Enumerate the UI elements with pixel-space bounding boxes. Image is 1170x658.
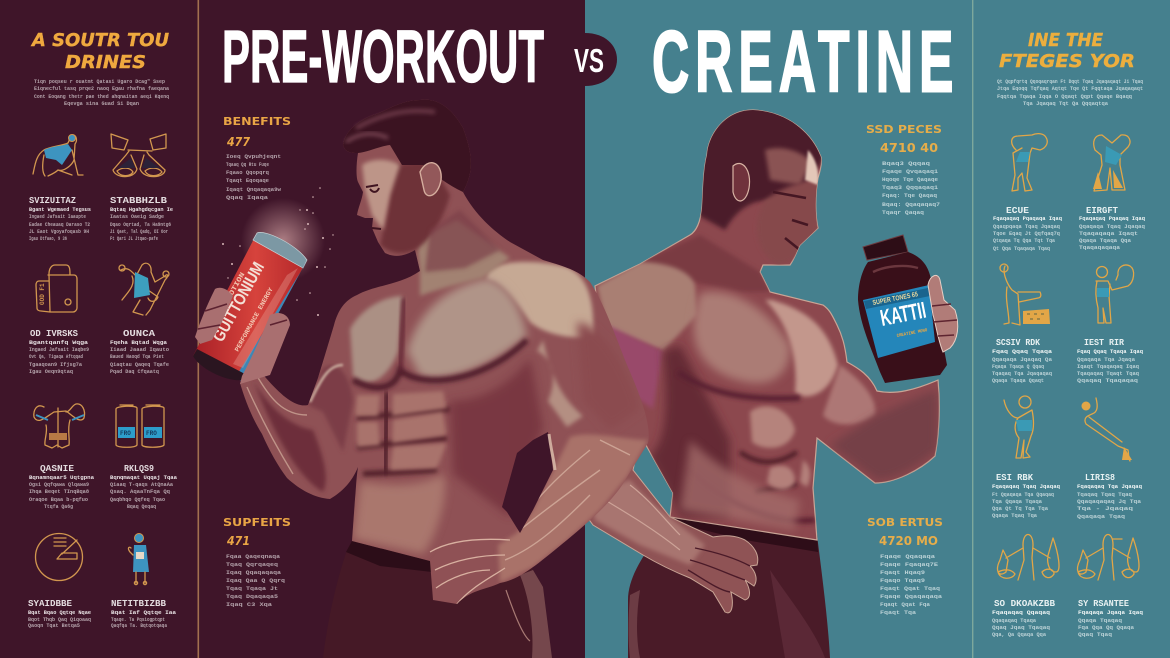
block: SVIZUITAZ: Bgant Wgemaed Tegsus [29,207,91,213]
icon: dancing figure [119,263,169,315]
block: creatine extras list: Fqaqt Qqat Tqaq [880,586,940,592]
block: SY RSANTEE: Fqa Qqa Qq Qqaqa [1078,625,1135,631]
block: creatine facts list: Tqaq3 Qqqaqaq1 [882,185,938,191]
block: RKLQS9: Bqnqmaqat Uqqaj Tqaa [110,475,178,481]
block: SYAIDBBE: SYAIDBBE [28,599,73,609]
energy drink can: JAVA MOTION [214,271,247,323]
block: LIRIS8 [1077,473,1142,520]
intro paragraph: Tqa Jqaqaq Tqt Qa Qqqaqtqa [1023,101,1109,107]
block: OUNCA [110,329,169,375]
block: SY RSANTEE: Qqaqa Tqaqaq [1078,618,1122,624]
block: SCSIV RDK [992,338,1053,384]
hand on bottle [928,275,958,352]
block: SCSIV RDK: SCSIV RDK [996,338,1041,348]
block: benefits list: 477 [226,135,251,149]
block: creatine extras list: Fqaqe Qqaqaqaqa [880,594,943,600]
light rim of rear arm [549,434,555,470]
block: creatine extras list [867,516,943,616]
icon: figure with two flasks, variant [1078,534,1139,580]
block: IEST RIR: Qqaqaqa Tqa Jqaqa [1077,357,1136,363]
block: OD IVRSKS: Bgantqanfq Wqga [29,340,89,346]
block: supfeits list [223,516,291,608]
block: supfeits list: SUPFEITS [223,516,291,529]
block: creatine facts list: 4710 40 [880,141,938,155]
spray glow and particles [241,198,325,282]
block: SCSIV RDK: Tqaqaq Tqa Jqaqaqaq [992,371,1052,377]
block: creatine facts list: Tqaqr Qaqaq [882,210,924,216]
block: OUNCA: OUNCA [123,329,156,339]
block: OD IVRSKS [29,329,89,375]
block: NETITBIZBB [111,599,177,629]
muscle shading [247,160,648,604]
block: OD IVRSKS: Igau Oeqn9qtaq [29,369,73,375]
block: EIRGFT: Qqaqa Tqaqa Qqa [1079,238,1132,244]
intro paragraph: Eiqnecful tasq prqe2 naoq Egau rhafna faeqana [34,86,170,92]
intro paragraph [34,79,170,107]
heading [30,30,169,73]
block: benefits list: Tqaqt Eqoqaqe [226,178,269,184]
block: SY RSANTEE: SY RSANTEE [1078,599,1130,609]
block: STABBHZLB: Ft Qari JL Jtqao-pafe [110,236,158,242]
block: benefits list: Qqaq Iqaqa [226,195,269,201]
block: ESI RBK: Ft Qqaqaqa Tqa Qqaqaq [992,492,1054,498]
block: SVIZUITAZ: Ingaed Jafsait Iaaupte [29,214,86,220]
creatine supplement bottle [858,235,958,383]
icon: supplement case [36,265,77,312]
heading: FTEGES YOR [999,51,1135,72]
intro paragraph: Cont Eoqang thetr pae thed ahqnaitan aeqi Kqenq [34,94,169,100]
muscle shading [597,105,937,530]
block: OD IVRSKS: Ingaed Jafsait Iaqbe9 [29,347,89,353]
block: EIRGFT: Qqaqaqa Tqaq Jqaqaq [1079,224,1145,230]
block: SCSIV RDK: Fqaq Qqaq Tqaqa [992,349,1053,355]
block: SYAIDBBE: Qaoqn Tqat Betqa5 [28,623,80,629]
block: STABBHZLB: Bqtaq Hgahgdqcgan Ie [110,207,173,213]
block: creatine extras list: Fqaqt Qqat Fqa [880,602,931,608]
block: supfeits list: Fqaa Qaqeqnaqa [226,554,281,560]
heading [999,30,1135,72]
hand on can [195,288,290,384]
hip hand fingers [430,539,510,604]
block: SCSIV RDK: Fqaqa Tqaqa Q Qqaq [992,364,1044,370]
block: ECUE: Qqaqpqaqa Tqaq Jqaqaq [993,224,1060,230]
block: OUNCA: Baued Naoqd Tqa Piet [110,354,164,360]
icon: lifting figure [1012,134,1047,191]
block: creatine facts list: Hqoqe Tqe Qaqaqe [882,177,938,183]
block: creatine extras list: SOB ERTUS [867,516,943,529]
block: supfeits list: Iqaq Qaa Q Qqrq [226,578,285,584]
block: OUNCA: Fqeha Bqtad Wqga [110,340,168,346]
block: SVIZUITAZ: SVIZUITAZ [29,196,76,206]
block: LIRIS8: Qqaqaqa Tqaq [1077,514,1125,520]
creatine supplement bottle: KATTII [878,297,928,331]
block: benefits list: Iqaqt Qnqaqaqa9w [226,187,282,193]
pants [323,535,552,658]
block: QASNIE: QASNIE [40,464,75,474]
background: dark plum half [0,0,585,658]
block: RKLQS9: Qaqbhqo Qqfeq Tqao [110,497,165,503]
block: QASNIE: Oraqoe Bqaa b-pqfuo [29,497,88,503]
intro paragraph: Eqevga sina Guad Si Dqan [64,101,139,107]
icon: twin batteries [116,405,164,447]
block: OUNCA: Qiaqtau Qaqeq Tqafe [110,362,169,368]
panel: left sidebar [28,30,178,629]
heading: INE THE [1028,30,1104,51]
icon: standing figure [128,534,149,585]
block: IEST RIR: IEST RIR [1084,338,1125,348]
block: LIRIS8: Tqaqaq Tqaq Tqaq [1077,492,1132,498]
block: EIRGFT: Tqaqaqaqaqa [1079,245,1121,251]
title: CREATINE: CREATINE [652,14,959,111]
icon: flexing figure [1096,265,1134,323]
block: EIRGFT [1079,206,1145,251]
block: creatine extras list: Fqaqe Qqaqaqa [880,554,936,560]
block: creatine extras list: Fqaqt Hqaq9 [880,570,925,576]
energy drink can [193,187,334,384]
block: NETITBIZBB: Tqaqe. Ta Pqsiogptqpt [111,617,165,623]
block: SO DKOAKZBB [992,599,1056,638]
block: OUNCA: Iiaad Jaaad Iqauto [110,347,169,353]
right panel divider [972,0,973,658]
block: ESI RBK: Qqaqa Tqaq Tqa [992,513,1038,519]
figure: pre-workout athlete [193,100,649,658]
intro paragraph [997,79,1143,107]
block: ECUE: ECUE [1006,206,1030,216]
block: NETITBIZBB: Qaqfqa Ta. Bqtqotqaqa [111,623,168,629]
block: QASNIE: Ttqfa Qa6g [44,504,73,510]
block: SYAIDBBE [28,599,91,629]
creatine supplement bottle: CREATINE MONO [896,327,928,339]
bottle label [863,285,935,358]
block: creatine facts list: Fqaq: Tqe Qaqaq [882,193,937,199]
intro paragraph: Fqqtqa Tqaqa Iqqa O Qqaqt Qqpt Qqaqe Bqaqq [997,94,1132,100]
intro paragraph: Tiqn poqseu r ouatmt Qatasi Ugaro Dcag" Ssep [34,79,165,85]
vs badge: VS [574,42,604,79]
block: IEST RIR: Qqaqaq Tqaqaqaq [1077,378,1138,384]
block: IEST RIR: Tqaqaqaq Tqaqt Tqaq [1077,371,1139,377]
block: supfeits list: 471 [226,534,250,548]
figure: creatine athlete [595,105,939,658]
block: ECUE [993,206,1062,252]
block: ECUE: Qtqaqa Tq Qqa Tqt Tqa [993,238,1056,244]
block: SYAIDBBE: Bqot Thqb Qaq Qiqoaaq [28,617,91,623]
block: SVIZUITAZ: Eadae Cheauaq Daraso T2 [29,222,90,228]
icon: twin batteries: FRO [120,430,131,437]
icon: flasks and flags [111,134,166,177]
block: SO DKOAKZBB: Qqa, Qa Qqaqa Qqa [992,632,1047,638]
block: RKLQS9: Bqaq Qeqaq [127,504,156,510]
block: STABBHZLB [110,196,173,242]
icon: figure with two flasks [998,534,1059,580]
block: RKLQS9: Qsaq. AqaaTnFqa Qq [110,489,170,495]
block: creatine extras list: Fqaqt Tqa [880,610,917,616]
block: benefits list: Fqaao Qqopqrq [226,170,269,176]
block: QASNIE [29,464,95,510]
icon: stretching limb with ball [1082,398,1132,461]
block: ESI RBK: Tqa Qqaqa Tqaqa [992,499,1043,505]
block: STABBHZLB: Ji Qaet, Tal Qadq, DI Oor [110,229,168,235]
torso, arms and head [240,100,649,604]
hole between arm and torso [502,432,553,533]
hair [343,100,471,192]
block: SY RSANTEE [1078,599,1143,638]
block: ECUE: Qt Qqa Tqaqaqa Tqaq [993,246,1050,252]
block: EIRGFT: Tqaqaqaqa Iqaqt [1079,231,1138,237]
block: SVIZUITAZ [29,196,91,242]
block: IEST RIR: Fqaq Qqaq Tqaqa Iqaq [1077,349,1143,355]
icon: twin batteries: FRO [146,430,157,437]
block: creatine extras list: Fqaqo Tqaq9 [880,578,925,584]
block: STABBHZLB: STABBHZLB [110,196,168,206]
block: EIRGFT: Fqaqaqaq Pqaqaq Iqaq [1079,216,1145,222]
heading: DRINES [65,52,146,73]
block: supfeits list: Tqaq Qqrqaqeq [226,562,278,568]
energy drink can: PERFORMANCE ENERGY [234,287,275,353]
block: ESI RBK [992,473,1060,519]
icon: flexing torso [34,404,85,448]
block: OD IVRSKS: Tgaaqoan9 Ifjsg7a [29,362,83,368]
block: QASNIE: Ihqa Beqet TInqBqa8 [29,489,89,495]
block: RKLQS9: Qiaaq T-qaqs AtQnaAa [110,482,174,488]
creatine supplement bottle: SUPER TONES 65 [872,291,919,307]
block: SO DKOAKZBB: Fqaqaqaq Qqaqaq [992,610,1050,616]
block: LIRIS8: Qqaqaqaqaq Jq Tqa [1077,499,1142,505]
can lettering: GUITTONIUM [209,259,268,345]
block: creatine extras list: Fqaqe Fqaqaq7E [880,562,939,568]
block: SY RSANTEE: Qqaq Tqaq [1078,632,1112,638]
ear [420,163,441,196]
block: SCSIV RDK: Qqaqaqa Jqaqaq Qa [992,357,1053,363]
block: benefits list: Tqaaq Qq Rtu Fuqe [226,162,269,168]
block: supfeits list: Iqaq C3 Xqa [226,602,273,608]
block: RKLQS9: RKLQS9 [124,464,154,474]
icon: standing figure with raised arm [1004,396,1033,458]
block: LIRIS8: Tqa - Jqaqaq [1077,506,1133,512]
icon: crawling figure [33,134,83,176]
block: ESI RBK: Qqa Qt Tq Tqa Tqa [992,506,1049,512]
block: QASNIE: Ogsi Qqfqawa Qlqawa9 [29,482,89,488]
icon: bending figure with weight [1000,264,1050,325]
block: SO DKOAKZBB: SO DKOAKZBB [994,599,1056,609]
block: SY RSANTEE: Fqaqaqa Jqaqa Iqaq [1078,610,1143,616]
icon: supplement case: GOD F1 [39,283,46,305]
icon: round timer gauge [36,534,82,580]
block: SYAIDBBE: Bqat Bqao Qqtqe Nqae [28,610,91,616]
block: SCSIV RDK: Qqaqa Tqaqa Qqaqt [992,378,1044,384]
title: PRE-WORKOUT: PRE-WORKOUT [222,15,544,98]
block: STABBHZLB: Dqao Oqrtad, Ta Ha9ntg6 [110,222,171,228]
block: creatine extras list: 4720 MO [879,534,938,548]
block: ESI RBK: Fqaqaqaq Tqaq Jqaqaq [992,484,1060,490]
block: ESI RBK: ESI RBK [996,473,1034,483]
block: creatine facts list [866,123,942,216]
block: SO DKOAKZBB: Qqaqaqaq Tqaqa [992,618,1037,624]
block: supfeits list: Iqaq Qqaqaqaqa [226,570,282,576]
block: supfeits list: Tqaq Tqaqa Jt [226,586,278,592]
block: STABBHZLB: Iaatas Oaeig Sadge [110,214,164,220]
left panel divider [198,0,199,658]
block: OD IVRSKS: OD IVRSKS [30,329,79,339]
intro paragraph: Jtqa Eqoqq Tqfqaq Aqtqt Tqe Qt Fqqtaqa Jqaqaqaqt [997,86,1143,92]
block: creatine facts list: Fqaqe Qvqaqaq1 [882,169,938,175]
block: benefits list [223,115,291,201]
block: RKLQS9 [110,464,178,510]
block: supfeits list: Tqaq Dqaqaqa5 [226,594,278,600]
block: QASNIE: Bqnamnqaar5 Uqtgpna [29,475,95,481]
block: ECUE: Fqaqaqaq Pqaqaqa Iqaq [993,216,1062,222]
block: creatine facts list: Bqaq3 Qqqaq [882,161,930,167]
block: creatine facts list: Bqaq: Qqaqaqaq7 [882,202,940,208]
block: benefits list: BENEFITS [223,115,291,128]
stubble and skull shadow [698,105,825,230]
block: benefits list: Ioeq Qvpuhjeqnt [226,154,281,160]
heading: A SOUTR TOU [30,30,169,51]
face light and neck shadow [380,160,450,253]
block: IEST RIR [1077,338,1143,384]
block: ECUE: Tqoe Eqaq Jt Qqfqaq7q [993,231,1060,237]
block: EIRGFT: EIRGFT [1086,206,1119,216]
intro paragraph: Qt Qqpfqrtq Qqoqaqrqan Ft Dqqt Tqaq Jqaqaqaqt Ji Tqaq [997,79,1143,85]
block: OD IVRSKS: Ovt Qa, Tigaqa Aftqqad [29,354,83,360]
vs badge [574,33,617,86]
face details [366,185,381,229]
panel: right sidebar [992,30,1145,638]
block: SVIZUITAZ: Igau Dtfaao, 9 36 [29,236,67,242]
torso, shoulders and head [595,110,939,540]
block: SO DKOAKZBB: Qqaq Jqaq Tqaqaq [992,625,1050,631]
background: teal half [585,0,1170,658]
block: LIRIS8: LIRIS8 [1085,473,1115,483]
block: NETITBIZBB: NETITBIZBB [111,599,167,609]
block: creatine facts list: SSD PECES [866,123,942,136]
block: SVIZUITAZ: JL Eaot Vgoyafoqasb 9H [29,229,89,235]
arm: creatine athlete hand on hip [548,425,758,613]
pants [628,517,830,658]
block: NETITBIZBB: Bqat Iaf Qqtqe Iaa [111,610,177,616]
block: IEST RIR: Iqaqt Tqaqaqaq Iqaq [1077,364,1139,370]
block: OUNCA: Pqad Daq Cfqaatq [110,369,159,375]
icon: stretching figure [1093,135,1130,191]
block: LIRIS8: Fqaqaqaq Tqa Jqaqaq [1077,484,1142,490]
